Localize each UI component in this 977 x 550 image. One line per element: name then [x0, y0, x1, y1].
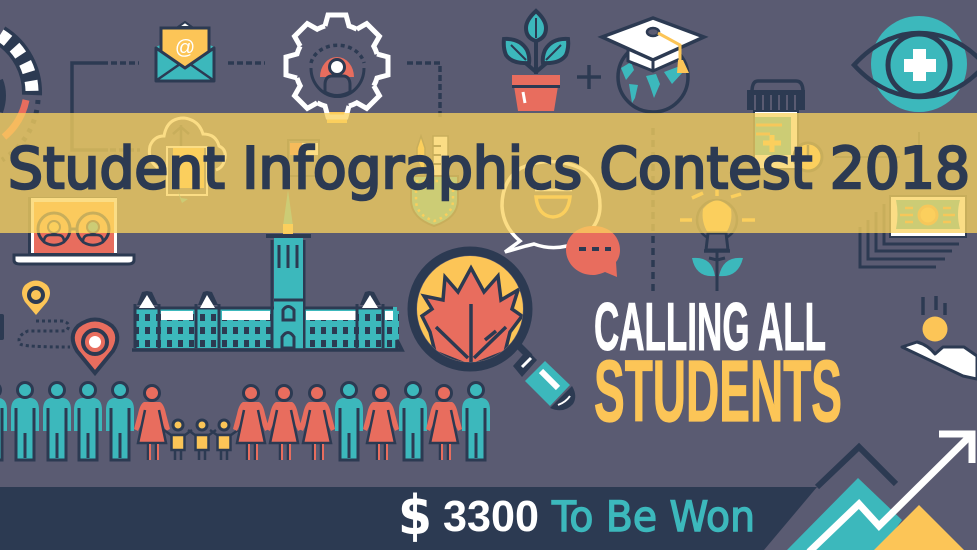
icon: envelope: @: [175, 37, 195, 59]
icon: pencil ruler and shield: [411, 136, 458, 226]
icon: pill bottle: [747, 81, 919, 171]
row of people: [0, 382, 490, 460]
icon: envelope: [156, 22, 214, 81]
prize text: To Be Won: [551, 492, 755, 541]
icon: white speech bubble: [502, 162, 600, 252]
icon: growth chart with mountains and arrow: [787, 434, 972, 550]
title banner: [0, 113, 977, 233]
prize text: 3300: [443, 492, 539, 541]
icon: coral map pin: [73, 320, 117, 373]
icon: chart card: [288, 140, 319, 176]
icon: magnifier with maple leaf: [412, 251, 575, 410]
icon: gauge at left edge: [0, 35, 38, 160]
title: Student Infographics Contest 2018: [8, 136, 970, 202]
icon: plant in pot: [504, 11, 568, 111]
heading: calling all students: [594, 289, 842, 440]
icon: stack of banknotes: [860, 196, 966, 267]
icon: globe with graduation cap: [602, 18, 704, 112]
dotted route between pins: [19, 321, 70, 347]
icon: cloud with books: [149, 118, 225, 203]
icon: suitcase edge: [0, 314, 4, 340]
icon: lightbulb on leaves: [680, 190, 755, 291]
icon: yellow map pin: [22, 280, 50, 315]
icon: gear with person: [286, 15, 388, 123]
prize text: $: [398, 484, 432, 547]
icon: coral speech bubble: [566, 226, 620, 277]
icon: plus sign: [577, 65, 601, 89]
prize text: [398, 484, 755, 547]
icon: laptop with two people: [14, 197, 134, 264]
icon: eye with medical cross: [854, 16, 977, 112]
connector lines: [72, 63, 653, 291]
prize bar: [0, 487, 817, 550]
icon: Canadian Parliament building: [132, 190, 402, 350]
icon: hand holding coin: [902, 296, 977, 379]
